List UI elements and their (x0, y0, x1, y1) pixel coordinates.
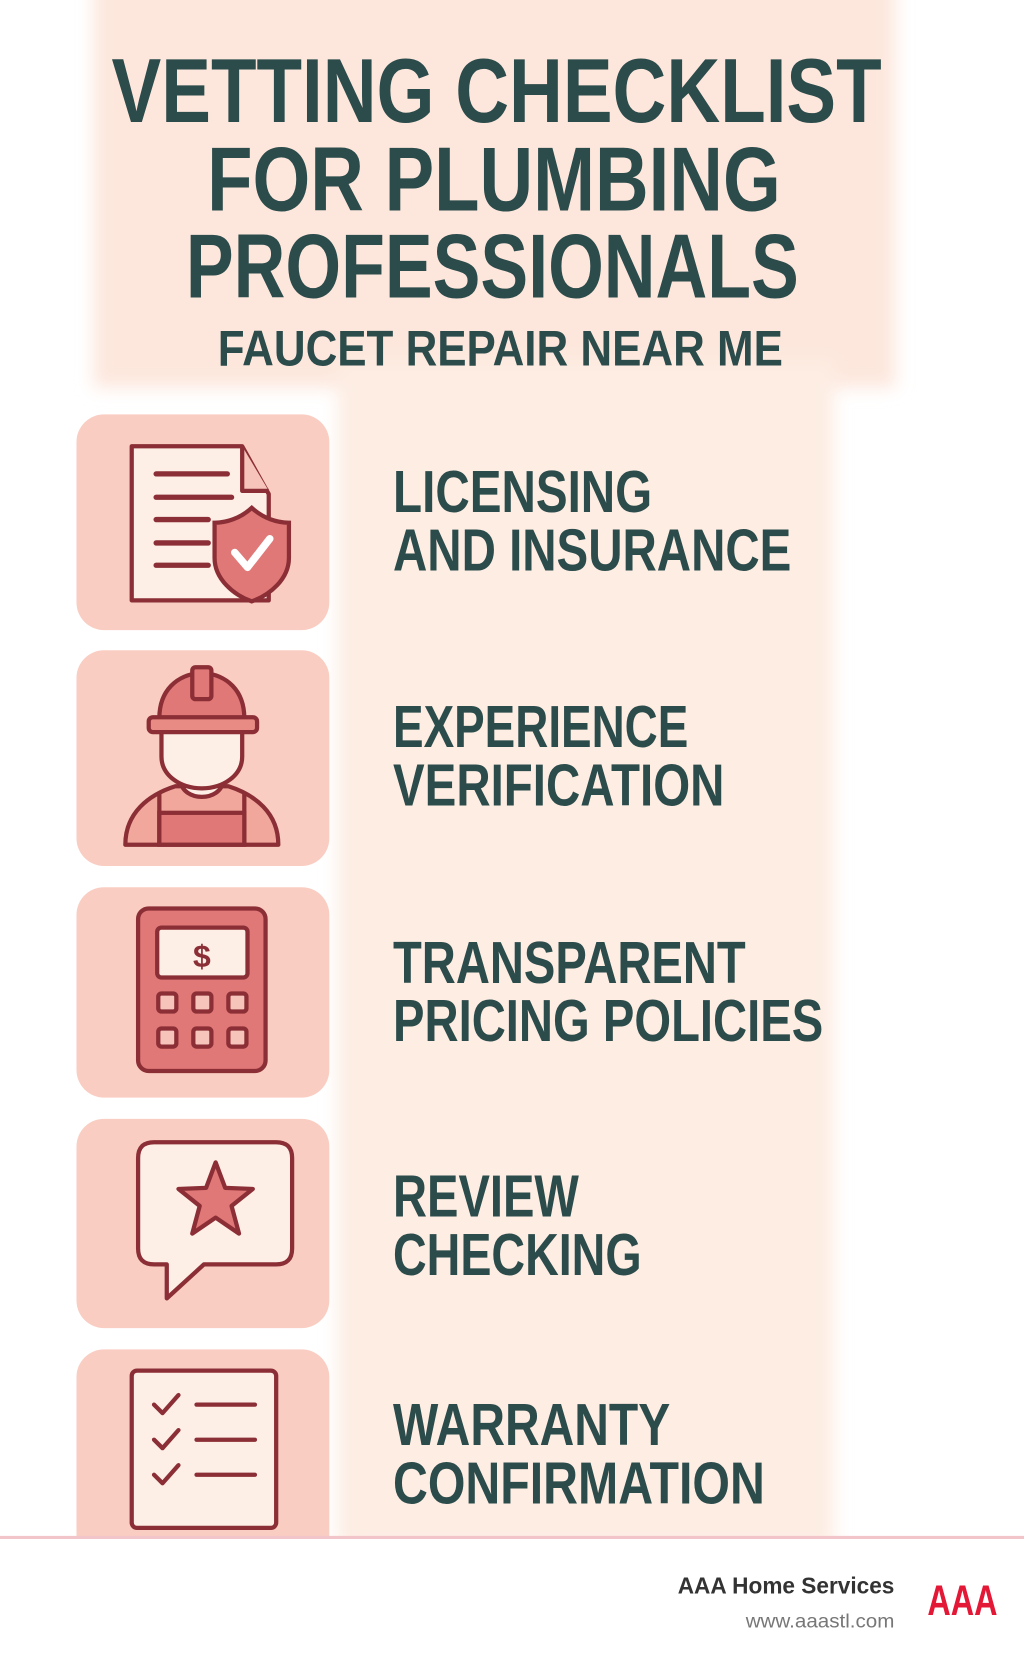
footer brand text: AAA Home Services (678, 1573, 894, 1599)
label: WARRANTY (393, 1391, 670, 1458)
label: TRANSPARENT (393, 929, 746, 996)
icon card: calculator (76, 887, 329, 1098)
item 5: warranty confirmation (76, 1349, 765, 1562)
title (112, 40, 882, 318)
label: REVIEW (393, 1163, 580, 1230)
background: title area (93, 0, 895, 1551)
label: VERIFICATION (393, 751, 724, 818)
label (393, 1391, 765, 1516)
subtitle: FAUCET REPAIR NEAR ME (218, 320, 783, 377)
footer (0, 1537, 1024, 1666)
icon card: speech bubble star (76, 1119, 329, 1328)
icon card: calculator: $ (193, 938, 211, 974)
title: FOR PLUMBING (207, 128, 781, 230)
label: EXPERIENCE (393, 693, 688, 760)
label: CHECKING (393, 1221, 642, 1288)
logo: AAA: AAA (927, 1578, 997, 1625)
item 4: review checking (76, 1119, 642, 1328)
title: PROFESSIONALS (186, 215, 799, 318)
label (393, 929, 823, 1054)
label (393, 458, 791, 584)
footer: www.aaastl.com (745, 1612, 894, 1633)
item 3: transparent pricing (76, 887, 823, 1098)
icon card: checklist (76, 1349, 329, 1562)
label (393, 1163, 642, 1288)
icon card: document with shield (76, 414, 329, 630)
label: PRICING POLICIES (393, 987, 823, 1054)
label: AND INSURANCE (393, 517, 791, 584)
label (393, 693, 724, 818)
label: LICENSING (393, 458, 652, 525)
item 1: licensing and insurance (76, 414, 791, 630)
label: CONFIRMATION (393, 1449, 765, 1516)
icon card: worker (76, 650, 329, 866)
item 2: experience verification (76, 650, 724, 866)
